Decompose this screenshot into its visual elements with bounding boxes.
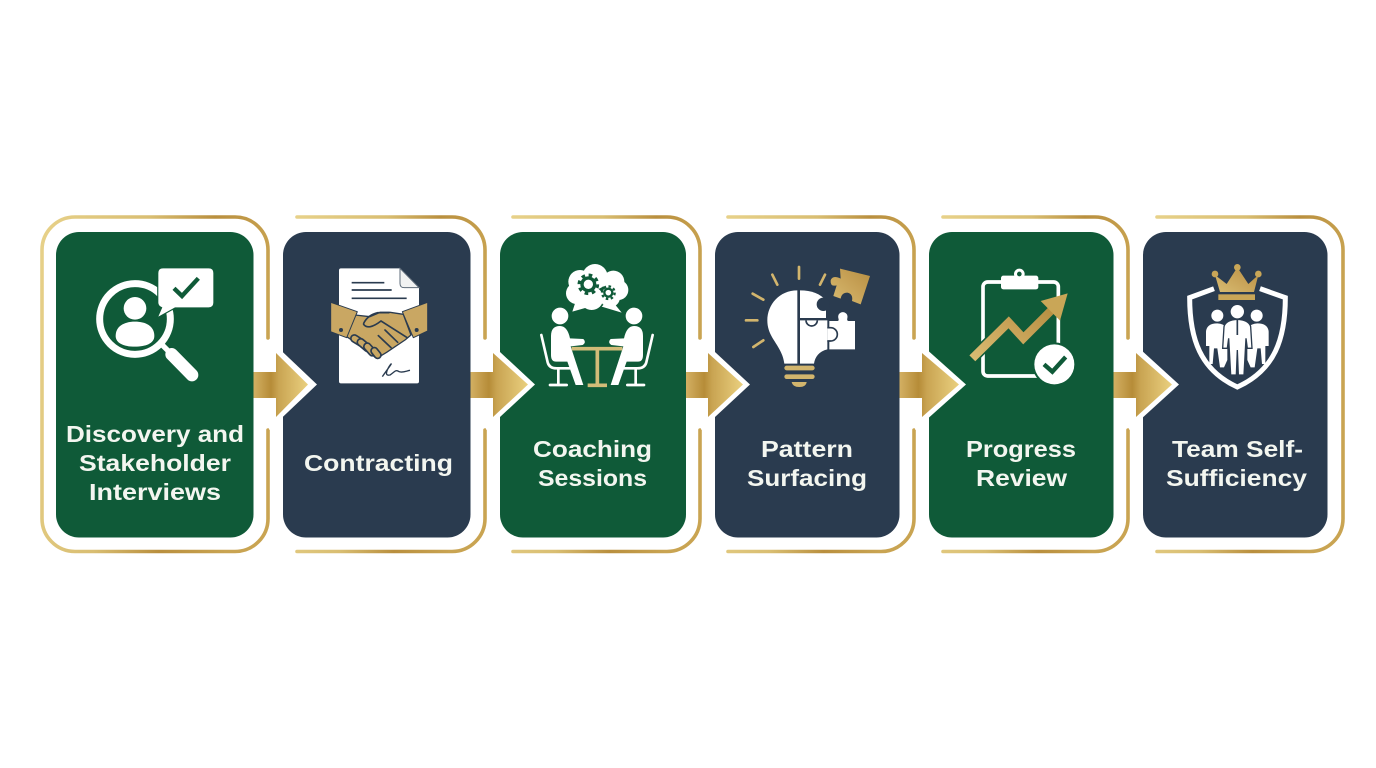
card 2 xyxy=(283,232,470,538)
label 6: Sufficiency xyxy=(1166,465,1307,491)
gold frame 6 xyxy=(1157,217,1343,552)
icon: contract and handshake xyxy=(331,268,428,383)
label 3: Sessions xyxy=(538,465,647,491)
right person xyxy=(609,308,653,385)
label 3: Coaching xyxy=(533,436,652,462)
step 5: Progress Review xyxy=(929,217,1128,552)
icon: light bulb with puzzle pieces xyxy=(746,267,870,387)
card 5 xyxy=(929,232,1114,538)
label 4: Surfacing xyxy=(747,465,867,491)
label 1: Interviews xyxy=(89,479,221,505)
gold frame 5 xyxy=(943,217,1128,552)
step 1: Discovery and Stakeholder Interviews xyxy=(42,217,268,552)
gold frame 1 xyxy=(42,217,268,552)
card 4 xyxy=(715,232,900,538)
step 3: Coaching Sessions xyxy=(500,217,700,552)
step 2: Contracting xyxy=(283,217,485,552)
label 5: Progress xyxy=(966,436,1076,462)
label 2: Contracting xyxy=(304,450,453,476)
card 3 xyxy=(500,232,686,538)
icon: magnifier with person and speech bubble xyxy=(100,268,213,375)
arrow 4 xyxy=(900,339,966,430)
arrow 5 xyxy=(1114,339,1179,430)
label 5: Review xyxy=(976,465,1067,491)
gold frame 4 xyxy=(728,217,914,552)
step 4: Pattern Surfacing xyxy=(715,217,914,552)
icon: two people at a table with thought cloud xyxy=(541,264,653,385)
label 3 xyxy=(533,436,652,491)
label 4: Pattern xyxy=(761,436,853,462)
label 6 xyxy=(1166,436,1307,491)
arrow 3 xyxy=(686,339,750,430)
label 1 xyxy=(66,421,244,505)
icon: shield with crown and team xyxy=(1190,264,1285,387)
gold frame 3 xyxy=(513,217,700,552)
label 1: Discovery and xyxy=(66,421,244,447)
step 6: Team Self-Sufficiency xyxy=(1143,217,1343,552)
icon: clipboard with rising arrow and check xyxy=(972,269,1076,386)
arrow 2 xyxy=(470,339,535,430)
label 5 xyxy=(966,436,1076,491)
label 4 xyxy=(747,436,867,491)
label 6: Team Self- xyxy=(1172,436,1303,462)
card 1 xyxy=(56,232,254,538)
gold frame 2 xyxy=(297,217,485,552)
label 1: Stakeholder xyxy=(79,450,231,476)
left person xyxy=(541,308,585,385)
card 6 xyxy=(1143,232,1328,538)
arrow 1 xyxy=(254,339,317,430)
